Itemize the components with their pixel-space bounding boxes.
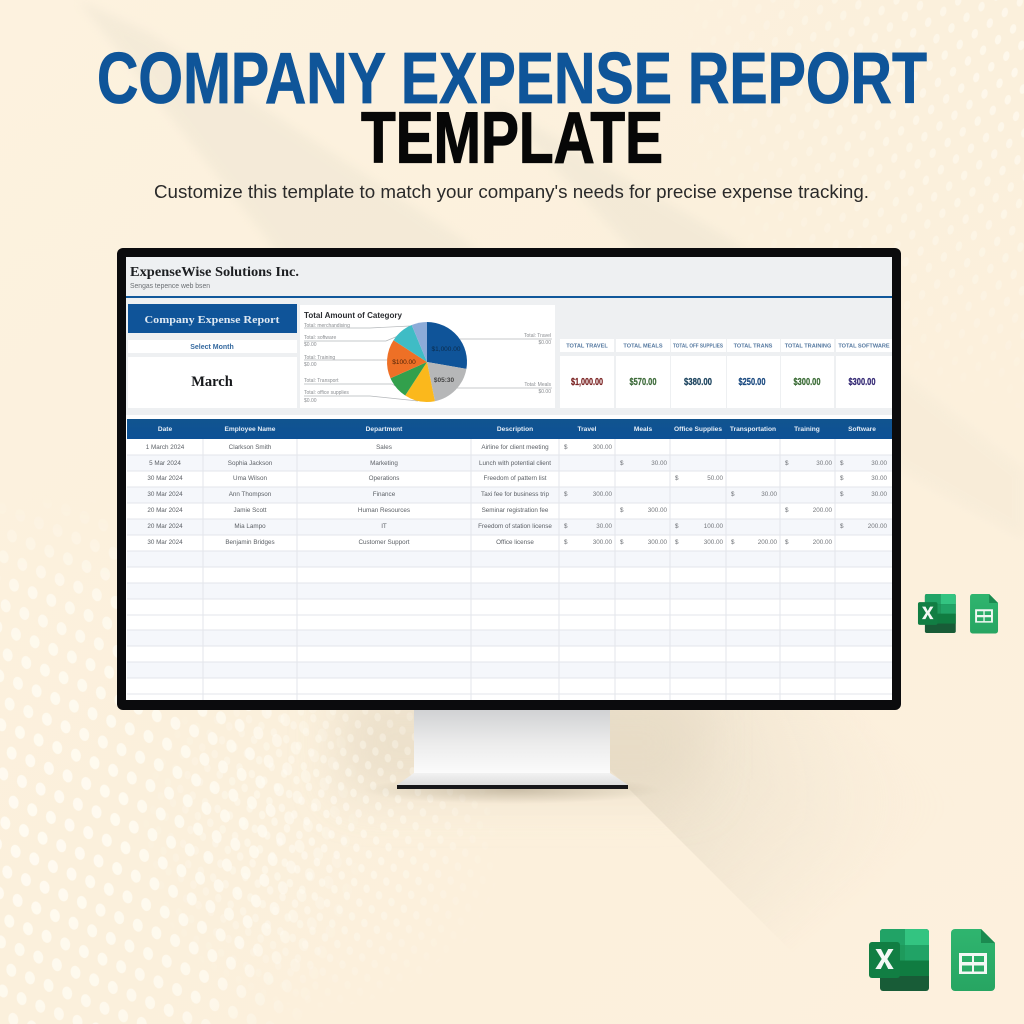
table header: Software bbox=[848, 426, 876, 433]
chart legend labels bbox=[304, 323, 551, 404]
table row 7: Customer Support bbox=[358, 539, 410, 546]
spreadsheet header: ExpenseWise Solutions Inc. bbox=[130, 264, 299, 279]
chart legend labels: Total: merchandising bbox=[304, 323, 350, 329]
table row 2: $ bbox=[840, 460, 844, 467]
table row 6: $ bbox=[564, 523, 568, 530]
table row 1: 1 March 2024 bbox=[146, 444, 185, 451]
table row 6: 200.00 bbox=[868, 523, 887, 530]
table row 4 bbox=[147, 491, 887, 498]
table header: Meals bbox=[634, 426, 652, 433]
KPI labels: TOTAL TRANS bbox=[734, 344, 773, 350]
stand neck bbox=[414, 708, 610, 773]
table row 4: 30.00 bbox=[871, 491, 887, 498]
table row 6: Mia Lampo bbox=[234, 523, 266, 530]
chart legend labels: Total: Meals bbox=[524, 382, 551, 388]
table row 2: $ bbox=[785, 460, 789, 467]
title bbox=[97, 39, 927, 178]
table row 1: $ bbox=[564, 444, 568, 451]
leader lines bbox=[304, 326, 552, 401]
chart legend labels: $0.00 bbox=[538, 389, 551, 395]
chart legend labels: $0.00 bbox=[538, 340, 551, 346]
spreadsheet header bbox=[126, 257, 892, 415]
table row 2: 5 Mar 2024 bbox=[149, 460, 181, 467]
table row 2: Marketing bbox=[370, 460, 398, 467]
spreadsheet header: Sengas tepence web bsen bbox=[130, 283, 210, 290]
table row 7: $ bbox=[620, 539, 624, 546]
table row 6: $ bbox=[675, 523, 679, 530]
table row 7: 300.00 bbox=[704, 539, 723, 546]
KPI labels: TOTAL SOFTWARE bbox=[838, 344, 890, 350]
table row 5: Human Resources bbox=[358, 507, 410, 514]
table header: Employee Name bbox=[225, 426, 276, 433]
table header: Department bbox=[366, 426, 403, 433]
table row 3: $ bbox=[840, 475, 844, 482]
chart legend labels: Total: software bbox=[304, 335, 336, 341]
month selector label: Select Month bbox=[190, 344, 234, 351]
table row 4: Taxi fee for business trip bbox=[481, 491, 549, 498]
icon: large Excel bbox=[869, 929, 929, 991]
table row 3: Uma Wilson bbox=[233, 475, 267, 482]
pie chart: $05:30 bbox=[434, 377, 454, 384]
screen bbox=[126, 257, 892, 700]
table row 5: $ bbox=[620, 507, 624, 514]
table row 6: 20 Mar 2024 bbox=[147, 523, 183, 530]
table row 7: $ bbox=[785, 539, 789, 546]
table row 2: Lunch with potential client bbox=[479, 460, 551, 467]
table row 3: Operations bbox=[369, 475, 399, 482]
table row 7: 200.00 bbox=[758, 539, 777, 546]
icon: small Google Sheets bbox=[970, 594, 998, 633]
table row 4: 30.00 bbox=[761, 491, 777, 498]
table row 1: Airline for client meeting bbox=[481, 444, 549, 451]
table row 4: 30 Mar 2024 bbox=[147, 491, 183, 498]
KPI values: $1,000.00 bbox=[571, 376, 603, 388]
month value bbox=[128, 357, 297, 408]
KPI cards bbox=[560, 339, 892, 408]
table row 6: 100.00 bbox=[704, 523, 723, 530]
KPI values bbox=[571, 376, 876, 388]
table header: Office Supplies bbox=[674, 426, 722, 433]
monitor bezel bbox=[117, 248, 901, 710]
table row 5: 300.00 bbox=[648, 507, 667, 514]
table row 3: $ bbox=[675, 475, 679, 482]
table row 7: 30 Mar 2024 bbox=[147, 539, 183, 546]
table row 7 bbox=[147, 539, 832, 546]
table row 6: 30.00 bbox=[596, 523, 612, 530]
report title block: Company Expense Report bbox=[144, 314, 280, 326]
KPI labels: TOTAL MEALS bbox=[623, 344, 663, 350]
subtitle: Customize this template to match your company's needs for precise expense tracking. bbox=[154, 182, 869, 202]
table row 1: Sales bbox=[376, 444, 392, 451]
table row 1: Clarkson Smith bbox=[229, 444, 272, 451]
chart title: Total Amount of Category bbox=[304, 310, 402, 320]
table row 2: 30.00 bbox=[816, 460, 832, 467]
chart legend labels: $0.00 bbox=[304, 362, 317, 368]
table row 5 bbox=[147, 507, 832, 514]
table row 4: $ bbox=[840, 491, 844, 498]
table row 7: 300.00 bbox=[648, 539, 667, 546]
table row 4: Finance bbox=[373, 491, 396, 498]
table row 7: Office license bbox=[496, 539, 534, 546]
pie chart: $1,000.00 bbox=[432, 346, 461, 353]
table row 5: 20 Mar 2024 bbox=[147, 507, 183, 514]
title line 2: TEMPLATE bbox=[361, 98, 663, 178]
chart legend labels: Total: Transport bbox=[304, 378, 339, 384]
table row 3: Freedom of pattern list bbox=[484, 475, 547, 482]
table row 3 bbox=[147, 475, 887, 482]
KPI labels: TOTAL TRAVEL bbox=[566, 344, 608, 350]
monitor stand bbox=[362, 708, 662, 804]
table row 3: 30.00 bbox=[871, 475, 887, 482]
pie chart panel bbox=[300, 305, 555, 408]
chart legend labels: $0.00 bbox=[304, 398, 317, 404]
pie chart: $100.00 bbox=[392, 359, 416, 366]
table row 6: IT bbox=[381, 523, 387, 530]
table row 5: 200.00 bbox=[813, 507, 832, 514]
table row 3: 30 Mar 2024 bbox=[147, 475, 183, 482]
table row 6: Freedom of station license bbox=[478, 523, 552, 530]
chart legend labels: Total: office supplies bbox=[304, 390, 349, 396]
table row 7: 200.00 bbox=[813, 539, 832, 546]
table row 5: Seminar registration fee bbox=[482, 507, 549, 514]
table row 1 bbox=[146, 444, 612, 451]
table header: Transportation bbox=[730, 426, 776, 433]
table header bbox=[127, 419, 892, 439]
table header: Training bbox=[794, 426, 820, 433]
expense table bbox=[127, 419, 892, 700]
table row 5: $ bbox=[785, 507, 789, 514]
table row 2: Sophia Jackson bbox=[228, 460, 273, 467]
table row 2: 30.00 bbox=[651, 460, 667, 467]
icon: large Google Sheets bbox=[951, 929, 995, 991]
KPI values: $300.00 bbox=[848, 376, 876, 388]
KPI values: $300.00 bbox=[794, 376, 821, 388]
KPI values: $250.00 bbox=[738, 376, 766, 388]
table row 3: 50.00 bbox=[707, 475, 723, 482]
table header: Date bbox=[158, 426, 172, 433]
monitor bbox=[117, 248, 901, 710]
pie chart bbox=[387, 322, 467, 402]
table row 4: Ann Thompson bbox=[229, 491, 272, 498]
table row 2 bbox=[149, 460, 887, 467]
table header: Description bbox=[497, 426, 533, 433]
table row 6 bbox=[147, 523, 887, 530]
table row 4: 300.00 bbox=[593, 491, 612, 498]
table header: Travel bbox=[577, 426, 597, 433]
table row 6: $ bbox=[840, 523, 844, 530]
KPI labels bbox=[566, 344, 890, 350]
stand shadow bbox=[362, 776, 662, 804]
table row 7: 300.00 bbox=[593, 539, 612, 546]
KPI labels: TOTAL TRAINING bbox=[785, 344, 831, 350]
chart legend labels: Total: Training bbox=[304, 355, 335, 361]
table row 7: $ bbox=[564, 539, 568, 546]
report title block bbox=[128, 304, 297, 333]
alternating rows bbox=[127, 455, 892, 678]
table row 7: Benjamin Bridges bbox=[225, 539, 275, 546]
table row 4: $ bbox=[731, 491, 735, 498]
table row 7: $ bbox=[731, 539, 735, 546]
KPI values: $570.00 bbox=[630, 376, 657, 388]
KPI values: $380.00 bbox=[684, 376, 712, 388]
icon: small Excel bbox=[918, 594, 956, 633]
table row 2: 30.00 bbox=[871, 460, 887, 467]
table row 7: $ bbox=[675, 539, 679, 546]
month value: March bbox=[191, 374, 233, 390]
KPI labels: TOTAL OFF SUPPLIES bbox=[673, 344, 723, 350]
table row 4: $ bbox=[564, 491, 568, 498]
table row 1: 300.00 bbox=[593, 444, 612, 451]
chart legend labels: $0.00 bbox=[304, 342, 317, 348]
table row 5: Jamie Scott bbox=[234, 507, 267, 514]
table row 2: $ bbox=[620, 460, 624, 467]
chart legend labels: Total: Travel bbox=[524, 333, 551, 339]
month selector label bbox=[128, 340, 297, 353]
stand base bbox=[397, 773, 628, 789]
